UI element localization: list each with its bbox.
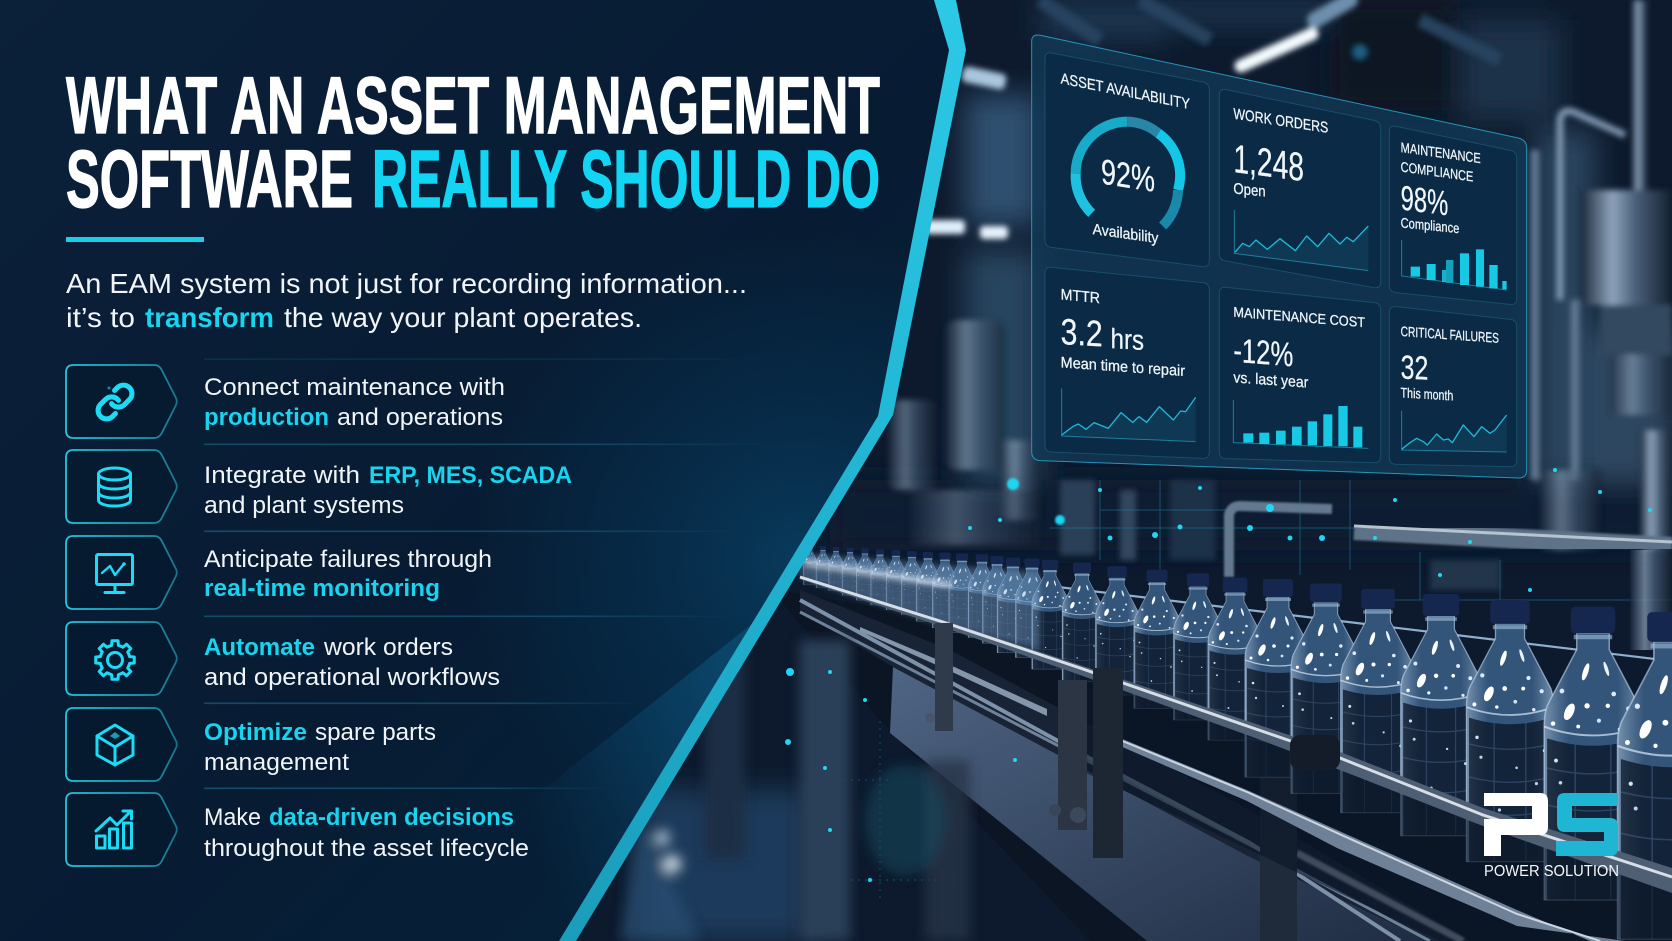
card: maintenance cost: -12% (1233, 332, 1293, 374)
card: MTTR: Mean time to repair (1061, 354, 1185, 380)
icon: growth chart (66, 793, 177, 866)
item: automate work orders: Automate (204, 634, 315, 661)
item: data-driven decisions (66, 793, 529, 866)
dashboard overlay (1032, 35, 1527, 478)
subtitle: transform (145, 302, 274, 333)
item: automate work orders: and operational workflows (204, 664, 500, 691)
cyan data points (968, 468, 1652, 592)
bar chart (1402, 240, 1507, 290)
card: maintenance cost: vs. last year (1233, 369, 1308, 392)
card: maintenance compliance: Compliance (1401, 214, 1459, 236)
item: optimize spare parts: management (204, 749, 349, 776)
item: optimize spare parts: spare parts (315, 719, 436, 746)
card: maintenance compliance: COMPLIANCE (1401, 158, 1473, 184)
dim bottles below rail (1080, 675, 1672, 941)
icon: monitor with trend (66, 536, 177, 609)
card: maintenance cost (1219, 287, 1381, 463)
icon: cube (66, 708, 177, 781)
far bottle glare (800, 553, 1040, 650)
item: connect maintenance: production (204, 404, 329, 431)
subtitle (66, 268, 747, 333)
logo: Power Solution: POWER SOLUTION (1484, 863, 1619, 880)
item: automate work orders: work orders (323, 634, 453, 661)
lower-left blurred floor (620, 620, 970, 941)
left panel (0, 0, 966, 941)
card: asset availability: 92% (1101, 152, 1155, 200)
icon: database (66, 450, 177, 523)
bar chart (1233, 400, 1368, 448)
card: critical failures: 32 (1401, 349, 1428, 388)
icon: gear (66, 622, 177, 695)
item: optimize spare parts (66, 708, 436, 781)
item: anticipate failures: real-time monitoring (204, 575, 440, 602)
card: maintenance cost: MAINTENANCE COST (1233, 304, 1365, 330)
side rails and brackets (800, 576, 1672, 941)
logo: Power Solution (1484, 793, 1619, 880)
card: work orders: WORK ORDERS (1233, 106, 1328, 137)
card: maintenance compliance (1389, 126, 1517, 304)
card: critical failures: This month (1401, 384, 1453, 403)
item: connect maintenance: and operations (337, 404, 503, 431)
item: integrate systems (66, 450, 572, 523)
item: data-driven decisions: throughout the asset lifecycle (204, 835, 529, 862)
subtitle: it’s to (66, 302, 135, 333)
item: integrate systems: ERP, MES, SCADA (369, 462, 572, 489)
card: work orders (1219, 89, 1381, 288)
item: anticipate failures (66, 536, 492, 609)
card: asset availability (1045, 53, 1209, 267)
item: optimize spare parts: Optimize (204, 719, 307, 746)
card: asset availability: ASSET AVAILABILITY (1061, 70, 1190, 113)
conveyor frame (780, 590, 1672, 941)
metal pipes (1000, 506, 1672, 660)
card: critical failures: CRITICAL FAILURES (1401, 323, 1499, 346)
item: data-driven decisions: Make (204, 804, 261, 831)
item: connect maintenance: Connect maintenance with (204, 374, 505, 401)
title: WHAT AN ASSET MANAGEMENT (66, 61, 880, 151)
circuit grid (830, 480, 1672, 900)
card: work orders: Open (1233, 180, 1266, 201)
subtitle: the way your plant operates. (284, 302, 642, 333)
bottle row (803, 545, 1672, 939)
tanks and pipes (888, 0, 1672, 590)
title: SOFTWARE (66, 134, 353, 225)
item: data-driven decisions: data-driven decisions (269, 804, 514, 831)
item: automate work orders (66, 622, 500, 695)
item: anticipate failures: Anticipate failures through (204, 546, 492, 573)
title (66, 61, 880, 225)
subtitle: An EAM system is not just for recording information... (66, 268, 747, 299)
item: connect maintenance (66, 365, 505, 438)
card: MTTR (1045, 267, 1209, 458)
gauge 92% (1076, 122, 1180, 226)
item: integrate systems: and plant systems (204, 492, 404, 519)
card: maintenance compliance: 98% (1401, 178, 1448, 223)
item: integrate systems: Integrate with (204, 462, 360, 489)
left lower data points (785, 668, 1017, 882)
line chart (1234, 210, 1368, 271)
card: MTTR: hrs (1111, 323, 1144, 356)
card: asset availability: Availability (1093, 221, 1159, 247)
blurred plant background (640, 0, 1672, 941)
card: maintenance compliance: MAINTENANCE (1401, 139, 1481, 166)
card: work orders: 1,248 (1233, 136, 1304, 190)
card: MTTR: MTTR (1061, 286, 1100, 307)
title underline (66, 237, 204, 242)
card: critical failures (1389, 307, 1517, 467)
icon: chain link (66, 365, 177, 438)
card: MTTR: 3.2 (1061, 311, 1103, 355)
ceiling lights (925, 0, 1500, 239)
line chart (1402, 411, 1507, 452)
title: REALLY SHOULD DO (372, 134, 880, 225)
line chart (1062, 388, 1196, 442)
